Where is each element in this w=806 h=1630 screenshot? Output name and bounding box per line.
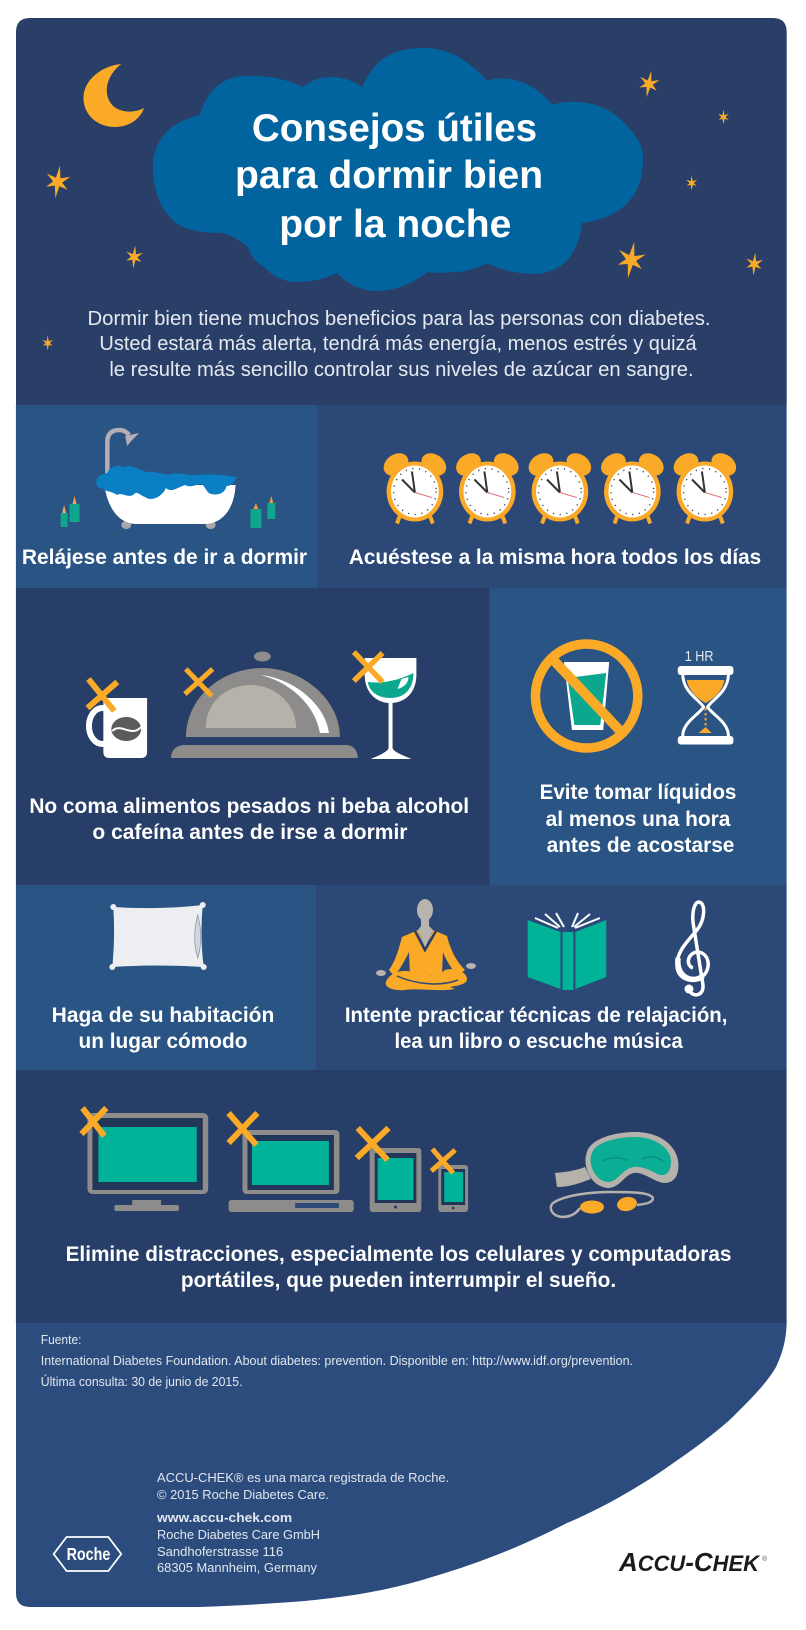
icon: desktop monitor (81, 1108, 208, 1211)
panel: same bedtime (317, 405, 787, 588)
label: comfortable room: un lugar cómodo (79, 1030, 247, 1053)
icon: coffee mug (87, 679, 147, 758)
icon: food cloche (171, 652, 358, 758)
label: comfortable room: Haga de su habitación (52, 1004, 274, 1027)
label: relaxation techniques: lea un libro o escuche música (395, 1030, 683, 1053)
icon: no drinking sign (535, 644, 638, 748)
panel: comfortable room (16, 885, 315, 1070)
intro text: Usted estará más alerta, tendrá más energía, menos estrés y quizá (99, 333, 697, 355)
panel: eliminate distractions (16, 1070, 787, 1323)
logo: Roche (54, 1537, 121, 1571)
logo: Roche: Roche (67, 1544, 110, 1564)
legal and address text: 68305 Mannheim, Germany (157, 1561, 318, 1575)
label: avoid liquids: Evite tomar líquidos (540, 781, 736, 804)
legal and address text: ACCU-CHEK® es una marca registrada de Roche. (157, 1471, 449, 1485)
icon: laptop (229, 1113, 354, 1212)
registered mark: ® (762, 1555, 768, 1563)
label: relaxation techniques (345, 1004, 727, 1053)
title: para dormir bien (235, 154, 543, 197)
legal and address text: www.accu-chek.com (156, 1511, 292, 1525)
icon: stars (42, 69, 764, 351)
label: same bedtime: Acuéstese a la misma hora todos los días (349, 546, 761, 569)
icon: moon (83, 64, 144, 127)
label: relax: Relájese antes de ir a dormir (22, 546, 307, 569)
label: food and alcohol: o cafeína antes de irse a dormir (92, 821, 407, 844)
label: avoid liquids (540, 781, 736, 857)
legal and address text: Roche Diabetes Care GmbH (157, 1528, 320, 1542)
icon: sleep mask and earplugs (551, 1132, 678, 1217)
icon: bathtub (61, 430, 275, 529)
label: food and alcohol: No coma alimentos pesados ni beba alcohol (29, 795, 469, 818)
icon: treble clef (677, 902, 708, 995)
intro text (87, 308, 711, 381)
icon: pillow (109, 902, 207, 970)
title: por la noche (279, 203, 511, 246)
icon: hourglass: 1 HR (685, 649, 714, 665)
legal and address text: © 2015 Roche Diabetes Care. (157, 1488, 329, 1502)
cloud (153, 48, 643, 291)
label: food and alcohol (29, 795, 469, 844)
label: relaxation techniques: Intente practicar técnicas de relajación, (345, 1004, 727, 1027)
logo: Accu-Chek: ACCU-CHEK (618, 1547, 761, 1577)
icon: open book (528, 913, 606, 990)
icon: hourglass (678, 649, 733, 744)
panel: food and alcohol (16, 588, 490, 885)
panel: relax (16, 405, 317, 588)
panel: header background (16, 18, 787, 405)
icon: candles (61, 496, 275, 528)
title: Consejos útiles (252, 107, 537, 150)
label: comfortable room (52, 1004, 274, 1053)
legal and address text: Sandhoferstrasse 116 (157, 1545, 283, 1559)
panel: avoid liquids (490, 588, 787, 885)
icon: tablet (357, 1128, 421, 1212)
source text: Última consulta: 30 de junio de 2015. (41, 1374, 242, 1389)
label: avoid liquids: antes de acostarse (547, 834, 734, 857)
intro text: le resulte más sencillo controlar sus niveles de azúcar en sangre. (109, 359, 694, 381)
title (235, 107, 543, 246)
intro text: Dormir bien tiene muchos beneficios para las personas con diabetes. (87, 308, 711, 330)
legal and address text (156, 1471, 449, 1575)
source text: International Diabetes Foundation. About diabetes: prevention. Disponible en: http://www.idf.org/prevention. (41, 1354, 633, 1368)
icon: wine glass (354, 652, 416, 759)
label: avoid liquids: al menos una hora (546, 808, 731, 831)
panel: footer (16, 1323, 787, 1607)
label: eliminate distractions: Elimine distracciones, especialmente los celulares y computadoras (66, 1243, 731, 1266)
source text (41, 1333, 633, 1389)
icon: meditating person (376, 899, 476, 990)
icon: alarm clocks (379, 449, 740, 524)
icon: phone (431, 1149, 468, 1212)
source text: Fuente: (41, 1333, 81, 1347)
panel: relaxation techniques (315, 885, 787, 1070)
label: eliminate distractions: portátiles, que pueden interrumpir el sueño. (181, 1269, 616, 1292)
label: eliminate distractions (66, 1243, 731, 1292)
